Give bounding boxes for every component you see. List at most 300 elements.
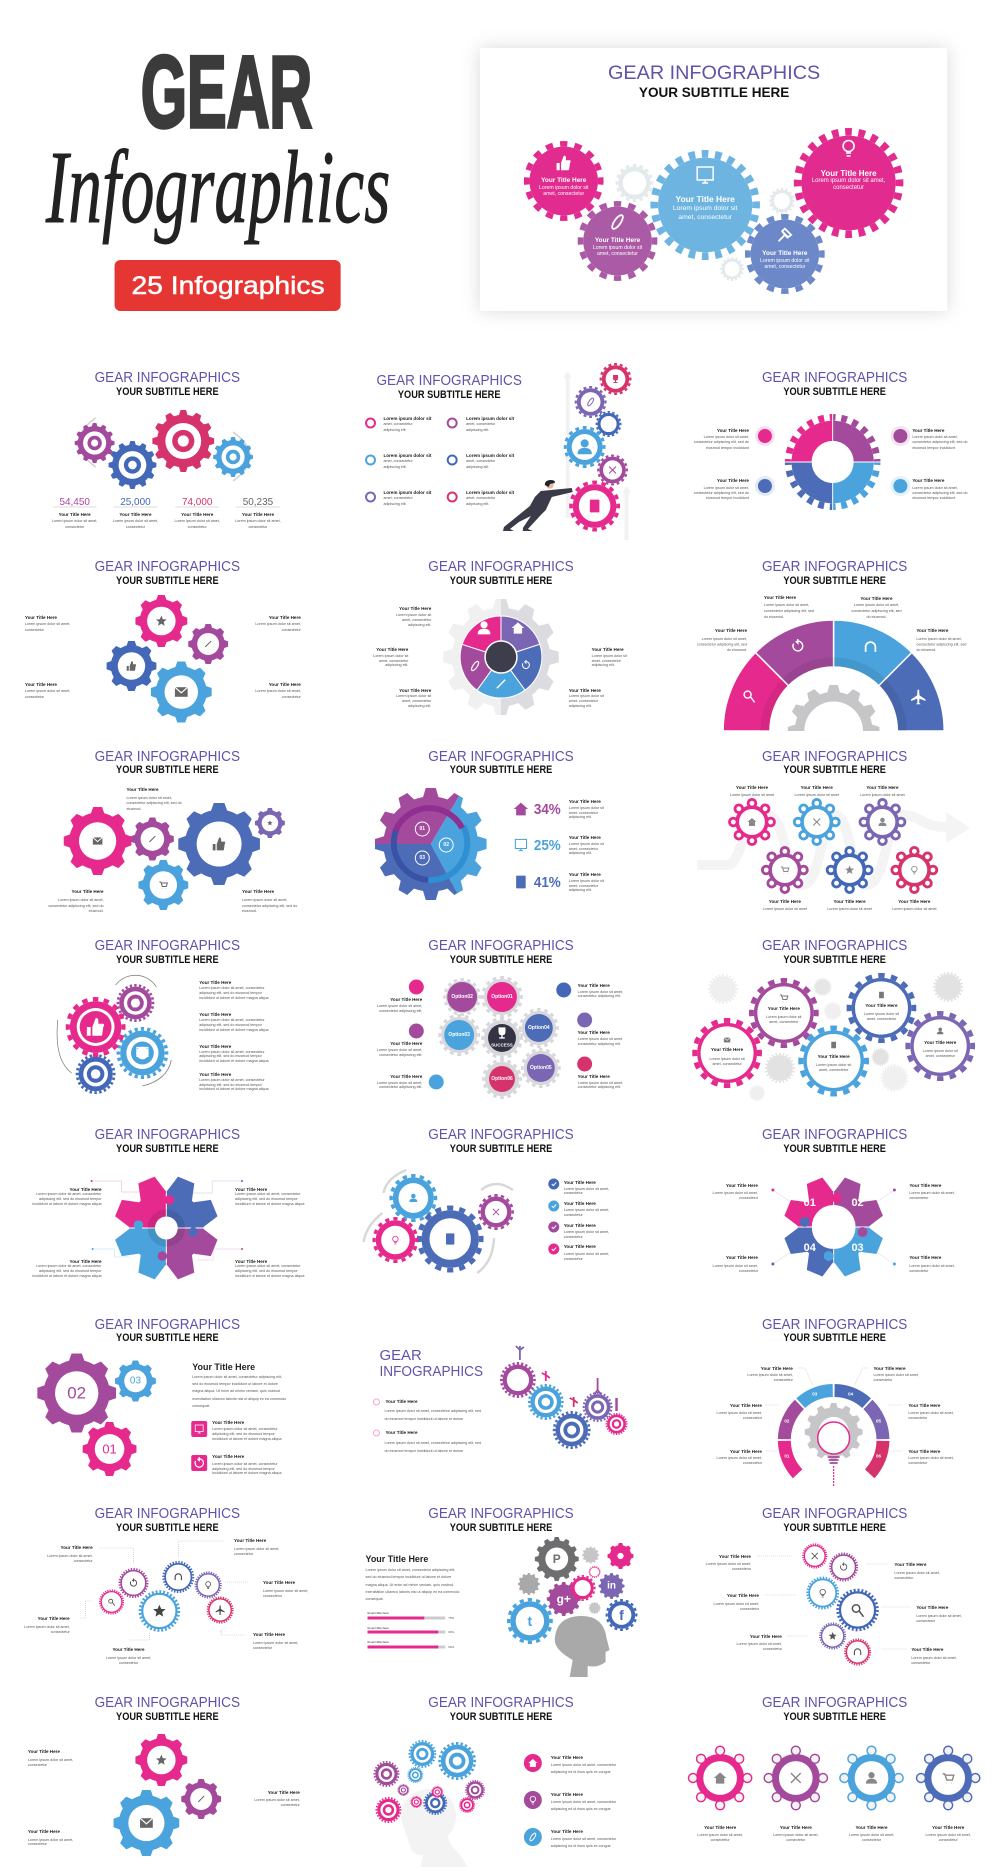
segment labels: 03 (420, 855, 425, 861)
badge: 25 Infographics (115, 260, 341, 311)
text top: Your Title Here (126, 786, 159, 792)
text 2: Your Title Here (385, 1429, 418, 1435)
text right: Your Title Here (268, 1789, 300, 1795)
text 5: Your Title Here (253, 1631, 286, 1637)
gear 03 (115, 1360, 156, 1402)
text left 2: amet, consectetur (379, 659, 409, 663)
main paragraph: exercitation ullamco laboris nisi ut aliquip ex ea commodo (192, 1397, 286, 1401)
gray gear (805, 1403, 863, 1461)
text bottom left: Lorem ipsum dolor sit amet, (713, 1264, 758, 1268)
main paragraph: Your Title Here (192, 1362, 255, 1372)
text item 2: Your Title Here (212, 1453, 245, 1459)
subtitle: YOUR SUBTITLE HERE (783, 954, 886, 966)
text 02: adipiscing elit. (466, 428, 489, 432)
text right 1: Your Title Here (592, 646, 624, 652)
gear: big pink: Lorem ipsum dolor sit amet, (812, 178, 886, 184)
text 1: Your Title Here (564, 1179, 596, 1185)
text 4: adipiscing elit, sed do eiusmod tempor (199, 1083, 263, 1087)
text 4: Your Title Here (932, 1824, 965, 1830)
gear icons (724, 992, 943, 1048)
text pink: Your Title Here (711, 1046, 744, 1052)
main title: GEAR: GEAR (141, 35, 312, 149)
rotation arrows (79, 418, 250, 481)
text bottom left: Lorem ipsum dolor sit amet, consectetur (36, 1264, 102, 1268)
icons (514, 803, 528, 888)
gear icons (93, 820, 273, 888)
head silhouette (401, 1789, 467, 1867)
text bottom right: Lorem ipsum dolor sit amet, (909, 1264, 955, 1268)
text left 1: Your Title Here (390, 996, 423, 1002)
paragraph: Lorem ipsum dolor sit amet, consectetur adipiscing elit, (366, 1568, 455, 1572)
text top left: Lorem ipsum dolor sit amet, consectetur (36, 1192, 102, 1196)
gears (65, 984, 168, 1094)
heading: GEAR (379, 1347, 422, 1364)
gear: pink: Lorem ipsum dolor sit (539, 185, 589, 191)
heading: GEAR INFOGRAPHICS (376, 372, 522, 389)
text 4: Lorem ipsum dolor sit amet, (24, 1625, 70, 1629)
preview subtitle: YOUR SUBTITLE HERE (639, 84, 789, 100)
segment numbers: 06 (876, 1453, 881, 1459)
gear: blue: Your Title Here (762, 249, 808, 257)
text 5: Your Title Here (750, 1633, 782, 1639)
gear stack (563, 363, 632, 532)
gray arrows (364, 1170, 513, 1273)
subtitle: YOUR SUBTITLE HERE (116, 1332, 219, 1344)
text left 1: amet, consectetur (402, 618, 432, 622)
text bottom left: incididunt ut labore et dolore magna aliqua (32, 1274, 103, 1278)
text right: Lorem ipsum dolor sit amet, (254, 1798, 300, 1802)
progress bars: Insert title here (368, 1626, 389, 1630)
text top: consectetur adipiscing elit, sed do (126, 801, 182, 805)
lobed gears (688, 1746, 981, 1810)
text top right: Your Title Here (912, 427, 945, 433)
heading: GEAR INFOGRAPHICS (762, 1505, 907, 1522)
slide 20: social gears with head (366, 1505, 638, 1677)
gear: light blue: Your Title Here (675, 194, 735, 204)
text bottom right: consectetur adipiscing elit, sed do (242, 904, 297, 908)
text top right: Lorem ipsum dolor sit amet, (909, 1191, 955, 1195)
slide 9: six lobed gears on path (697, 748, 970, 911)
text 2: Lorem ipsum dolor sit amet, (894, 1571, 940, 1575)
text right 1: amet, consectetur (592, 659, 622, 663)
text left 2: Your Title Here (390, 1040, 423, 1046)
lobed gears (728, 798, 938, 894)
gear: big pink: Your Title Here (821, 168, 877, 178)
text bottom 3: Lorem ipsum dolor sit amet (892, 907, 937, 911)
text 5: Your Title Here (730, 1448, 762, 1454)
text top right: do eiusmod. (866, 615, 887, 619)
text bottom right: eiusmod. (242, 909, 257, 913)
text 2: Your Title Here (234, 1537, 267, 1543)
text 05: amet, consectetur (383, 496, 413, 500)
text 5: Lorem ipsum dolor sit amet, (253, 1641, 298, 1645)
text 3: consectetur (263, 1594, 283, 1598)
text right 1: Your Title Here (578, 982, 610, 988)
text top left: Your Title Here (764, 594, 796, 600)
text 5: Lorem ipsum dolor sit amet, (717, 1456, 762, 1460)
text top right: consectetur (282, 628, 302, 632)
text 1: Your Title Here (551, 1754, 583, 1760)
progress bars: Insert title here (368, 1640, 389, 1644)
text left 3: amet, consectetur (402, 699, 432, 703)
subtitle: YOUR SUBTITLE HERE (783, 1711, 886, 1723)
numbers: 01 (804, 1197, 816, 1209)
gear: blue: amet, consectetur (764, 264, 806, 270)
text 1: Lorem ipsum dolor sit amet, (47, 1554, 93, 1558)
knobs (800, 1193, 868, 1261)
text bottom left: Your Title Here (726, 1254, 758, 1260)
text 1: Lorem ipsum dolor sit amet, consectetur adipiscing elit, sed (384, 1409, 481, 1413)
text 3: Your Title Here (730, 1402, 762, 1408)
text 4: Your Title Here (908, 1402, 941, 1408)
pale path arrow (697, 812, 970, 885)
heading: GEAR INFOGRAPHICS (762, 1316, 907, 1333)
segment labels: 02 (443, 842, 449, 848)
heading: GEAR INFOGRAPHICS (95, 748, 240, 765)
paragraph: magna aliqua. Ut enim ad minim veniam, quis nostrud (366, 1583, 453, 1587)
text top left: consectetur (25, 628, 45, 632)
text 1: Your Title Here (385, 1398, 418, 1404)
gears (114, 1734, 221, 1856)
text 3: Lorem ipsum dolor sit (569, 879, 604, 883)
text 5: consectetur (743, 1461, 763, 1465)
gear: purple (577, 200, 658, 282)
text bottom right: Your Title Here (235, 1258, 268, 1264)
gear: blue: Lorem ipsum dolor sit (760, 258, 810, 264)
paragraph: Your Title Here (366, 1554, 428, 1564)
text 6: Lorem ipsum dolor sit amet, (908, 1456, 954, 1460)
option 04 (525, 1014, 553, 1042)
text 2: Your Title Here (780, 1824, 812, 1830)
gears (692, 972, 976, 1097)
text 1: Lorem ipsum dolor sit amet, (697, 1833, 743, 1837)
text 4: Lorem ipsum dolor sit amet, (916, 1614, 962, 1618)
social labels: P (553, 1552, 561, 1566)
segment numbers (784, 1391, 881, 1459)
text 4: Lorem ipsum dolor sit amet, (925, 1833, 971, 1837)
text 2: consectetur (234, 1552, 254, 1556)
progress bars: 90% (448, 1630, 455, 1634)
text 1: adipiscing elit, sed do eiusmod tempor (199, 991, 263, 995)
text 1: amet, consectetur (569, 811, 599, 815)
text 04: adipiscing elit. (466, 465, 489, 469)
slide 17: climbing gears (374, 1346, 627, 1453)
slide 24: four lobed gears (688, 1694, 981, 1842)
subtitle: YOUR SUBTITLE HERE (398, 389, 500, 401)
text 1: do eiusmod tempor incididunt ut labore et dolore (384, 1417, 463, 1421)
text 1: adipiscing elit. (569, 815, 592, 819)
text left 2: Lorem ipsum dolor sit amet, (377, 1048, 422, 1052)
gear icons (140, 1755, 204, 1828)
text 1: consectetur (74, 1559, 93, 1563)
icon tiles (191, 1421, 207, 1471)
text light blue: Lorem ipsum dolor sit (816, 1063, 851, 1067)
text top 2: Lorem ipsum dolor sit amet (795, 793, 839, 797)
text 1: Your Title Here (761, 1365, 793, 1371)
text 01: adipiscing elit. (383, 428, 407, 432)
text left 2: consectetur adipiscing elit. (379, 1053, 422, 1057)
heading: GEAR INFOGRAPHICS (95, 558, 240, 575)
text bottom 1: Your Title Here (769, 898, 801, 904)
text pink: amet, consectetur (712, 1062, 742, 1066)
text 04: amet, consectetur (466, 459, 496, 463)
text 1: Lorem ipsum dolor sit amet, consectetur (199, 986, 265, 990)
text top left: adipiscing elit, sed do eiusmod tempor (39, 1197, 102, 1201)
slide 5: pie inside gray gear (373, 558, 627, 715)
text left 3: Your Title Here (399, 687, 432, 693)
text 6: Your Title Here (908, 1448, 941, 1454)
text 4: Your Title Here (199, 1071, 232, 1077)
list markers (366, 418, 457, 502)
text bottom left: Your Title Here (72, 888, 104, 894)
text bottom right: consectetur (282, 695, 302, 699)
text bottom left: Your Title Here (717, 477, 749, 483)
text bottom left: Lorem ipsum dolor sit amet, (704, 486, 749, 490)
side icons (524, 1754, 542, 1846)
text 2: consectetur (873, 1378, 893, 1382)
text left: Lorem ipsum dolor sit amet, (702, 637, 747, 641)
text 4: consectetur (908, 1416, 928, 1420)
text 05: adipiscing elit. (383, 502, 407, 506)
gears (107, 595, 228, 722)
gear: big pink: consectetur (833, 185, 864, 191)
ring icons (109, 1574, 225, 1617)
text top left: Your Title Here (25, 614, 57, 620)
text bottom left: Lorem ipsum dolor sit amet, (28, 1838, 73, 1842)
text left 1: Your Title Here (399, 605, 432, 611)
text 3: Your Title Here (569, 871, 601, 877)
text 2: adipiscing elit. (569, 851, 592, 855)
text right 1: Lorem ipsum dolor sit amet, (578, 990, 623, 994)
text right 1: adipiscing elit. (592, 663, 615, 667)
text 02: amet, consectetur (466, 422, 496, 426)
puzzle knobs (134, 1195, 198, 1261)
text item 2: Lorem ipsum dolor sit amet, consectetur (212, 1462, 278, 1466)
ring icons (812, 1553, 864, 1655)
ring arcs (394, 808, 467, 880)
text left: Your Title Here (715, 627, 747, 633)
text bottom left: consectetur adipiscing elit, sed do (48, 904, 104, 908)
text left 1: Lorem ipsum dolor sit amet, (377, 1004, 422, 1008)
text bottom 1: Lorem ipsum dolor sit amet (763, 907, 807, 911)
text right 1: consectetur adipiscing elit. (578, 994, 621, 998)
connector dots (771, 1188, 896, 1266)
text 1: Lorem ipsum dolor sit amet, (747, 1373, 793, 1377)
slide 3: four colour gear (694, 369, 968, 509)
text left 3: adipiscing elit. (408, 704, 431, 708)
social labels: g+ (557, 1592, 571, 1606)
text left 1: consectetur adipiscing elit. (379, 1009, 422, 1013)
text right 2: amet, consectetur (569, 699, 599, 703)
social labels: t (528, 1613, 533, 1629)
text 2: Lorem ipsum dolor sit (569, 842, 604, 846)
text 6: consectetur (119, 1661, 139, 1665)
subtitle: YOUR SUBTITLE HERE (783, 386, 886, 398)
text 2: Lorem ipsum dolor sit amet, consectetur adipiscing elit, sed (384, 1441, 481, 1445)
text 5: Lorem ipsum dolor sit amet, (736, 1642, 782, 1646)
text 3: Lorem ipsum dolor sit amet, consectetur (551, 1837, 617, 1841)
text bottom right: Your Title Here (269, 681, 301, 687)
text item 1: adipiscing elit, sed do eiusmod tempor (212, 1432, 276, 1436)
text 2: consectetur (786, 1838, 806, 1842)
text left 2: Your Title Here (376, 646, 409, 652)
text 3: adipiscing elit, sed do eiusmod tempor (199, 1054, 263, 1058)
text right: Lorem ipsum dolor sit amet, (916, 637, 962, 641)
option 01: Option01 (491, 994, 513, 1000)
text 2: consectetur (894, 1576, 914, 1580)
pale arrows (564, 372, 630, 540)
text bottom right: incididunt ut labore et dolore magna aliqua (235, 1274, 305, 1278)
text top right: Lorem ipsum dolor sit amet, (854, 603, 899, 607)
heading: GEAR INFOGRAPHICS (95, 1316, 240, 1333)
slide 11: option gears (377, 937, 623, 1099)
option 06: Option06 (491, 1076, 513, 1082)
gray gear (788, 685, 880, 731)
gray gear backs (438, 976, 561, 1099)
gear: light blue (651, 151, 759, 259)
text bottom left: Your Title Here (70, 1258, 102, 1264)
connectors (765, 1368, 902, 1451)
option 02 (447, 982, 477, 1012)
head silhouette (555, 1616, 610, 1677)
text bottom left: consectetur (28, 1842, 48, 1846)
text top right: consectetur adipiscing elit, sed do (912, 440, 968, 444)
heading: GEAR INFOGRAPHICS (762, 937, 907, 954)
text 3: Your Title Here (727, 1592, 759, 1598)
option 05: Option05 (530, 1065, 552, 1071)
text bottom 2: Lorem ipsum dolor sit amet (827, 907, 872, 911)
text 2: Lorem ipsum dolor sit amet, (773, 1833, 819, 1837)
text 2: amet, consectetur (569, 847, 599, 851)
text item 1: Your Title Here (212, 1419, 245, 1425)
text left: consectetur adipiscing elit, sed (697, 642, 747, 647)
option 05 (527, 1054, 555, 1082)
text 4: consectetur (916, 1619, 936, 1623)
text 1: Your Title Here (59, 511, 91, 517)
figures (516, 1346, 617, 1411)
segment numbers: 01 (784, 1453, 790, 1459)
numbers: 04 (804, 1242, 817, 1254)
text 3: Lorem ipsum dolor sit amet, (714, 1602, 759, 1606)
subtitle: YOUR SUBTITLE HERE (450, 1711, 552, 1723)
text right 2: Your Title Here (578, 1029, 610, 1035)
slide 13: puzzle gear (32, 1126, 305, 1281)
text 3: Lorem ipsum dolor sit amet, (564, 1230, 609, 1234)
heading: GEAR INFOGRAPHICS (95, 1694, 240, 1711)
slide 7: five gears (48, 748, 297, 913)
text 2: Your Title Here (894, 1561, 927, 1567)
gear: light blue: Lorem ipsum dolor sit (673, 204, 738, 212)
option 01 (487, 982, 517, 1012)
subtitle: YOUR SUBTITLE HERE (783, 764, 886, 776)
inner shadow band (765, 662, 902, 731)
bulb (818, 1422, 850, 1487)
slide 23: head with many gears (374, 1694, 617, 1867)
text bottom right: Your Title Here (912, 477, 945, 483)
text top left: Your Title Here (70, 1186, 102, 1192)
text 2: Lorem ipsum dolor sit amet, (234, 1547, 279, 1551)
text 1: Lorem ipsum dolor sit amet, (706, 1562, 751, 1566)
text top left: consectetur adipiscing elit, sed do (694, 440, 749, 444)
segment numbers: 03 (812, 1391, 818, 1397)
option 03 (444, 1020, 474, 1050)
numbers: 25,000 (120, 497, 151, 508)
gears (75, 410, 253, 489)
preview heading: GEAR INFOGRAPHICS (608, 63, 820, 84)
text top 1: Lorem ipsum dolor sit amet (730, 793, 774, 797)
text 2: Your Title Here (199, 1011, 232, 1017)
text top 3: Your Title Here (866, 784, 899, 790)
numbers (804, 1197, 864, 1254)
text top left: Your Title Here (726, 1182, 758, 1188)
subtitle: YOUR SUBTITLE HERE (450, 1143, 552, 1155)
text 03: Lorem ipsum dolor sit (383, 452, 432, 458)
text bottom left: consectetur adipiscing elit, sed do (694, 491, 749, 495)
text bottom left: consectetur (25, 695, 45, 699)
pale background gears (708, 972, 963, 1101)
text right 2: adipiscing elit. (569, 704, 592, 708)
text 2: Lorem ipsum dolor sit amet, consectetur (199, 1018, 265, 1022)
text right 1: Lorem ipsum dolor sit (592, 654, 627, 658)
gear 02: 02 (67, 1383, 86, 1403)
text 3: consectetur (743, 1416, 763, 1420)
text 3: consectetur (862, 1838, 882, 1842)
subtitle: YOUR SUBTITLE HERE (450, 1522, 552, 1534)
rules (53, 506, 280, 508)
numbers: 54,450 (59, 497, 90, 508)
progress bars (368, 1611, 455, 1649)
gray gear (443, 599, 559, 715)
text 2: consectetur (126, 525, 146, 529)
text blue: amet, consectetur (867, 1017, 897, 1021)
subtitle: YOUR SUBTITLE HERE (116, 386, 219, 398)
gear 02 (37, 1354, 116, 1432)
heading: GEAR INFOGRAPHICS (95, 1505, 240, 1522)
gear: big pink (794, 129, 903, 237)
text bottom left: Lorem ipsum dolor sit amet, (58, 898, 104, 902)
ring segments (723, 620, 944, 731)
text item 2: adipiscing elit, sed do eiusmod tempor (212, 1467, 276, 1471)
text violet: Your Title Here (924, 1039, 957, 1045)
text bottom right: Lorem ipsum dolor sit amet, (255, 689, 301, 693)
text 6: consectetur (911, 1661, 931, 1665)
segment numbers: 04 (848, 1391, 854, 1397)
slide 15: numbered quadrant gear (713, 1126, 955, 1278)
text left 2: Lorem ipsum dolor sit (373, 654, 408, 658)
heading: GEAR INFOGRAPHICS (762, 369, 907, 386)
heading: GEAR INFOGRAPHICS (428, 748, 574, 765)
segment numbers: 05 (876, 1418, 881, 1424)
gear hole (812, 1205, 856, 1249)
text bottom right: eiusmod tempor incididunt (912, 496, 955, 500)
text 2: Your Title Here (873, 1365, 906, 1371)
text top right: eiusmod tempor incididunt (912, 446, 955, 450)
text 1: Lorem ipsum dolor sit amet, consectetur (551, 1763, 617, 1767)
text 3: consectetur (564, 1235, 584, 1239)
success hub: SUCCESS (491, 1042, 513, 1048)
text 2: Lorem ipsum dolor sit amet, (564, 1208, 609, 1212)
text 4: Your Title Here (564, 1243, 596, 1249)
gears (500, 1362, 627, 1449)
text 2: Your Title Here (119, 511, 152, 517)
text right: consectetur (281, 1803, 301, 1807)
text 3: Lorem ipsum dolor sit amet, (849, 1833, 894, 1837)
heading: GEAR INFOGRAPHICS (762, 1694, 907, 1711)
dotted connectors (80, 1541, 249, 1640)
text purple: amet, consectetur (769, 1020, 799, 1024)
gears (372, 1174, 514, 1273)
slide 21: thin ring gear column (706, 1505, 962, 1665)
